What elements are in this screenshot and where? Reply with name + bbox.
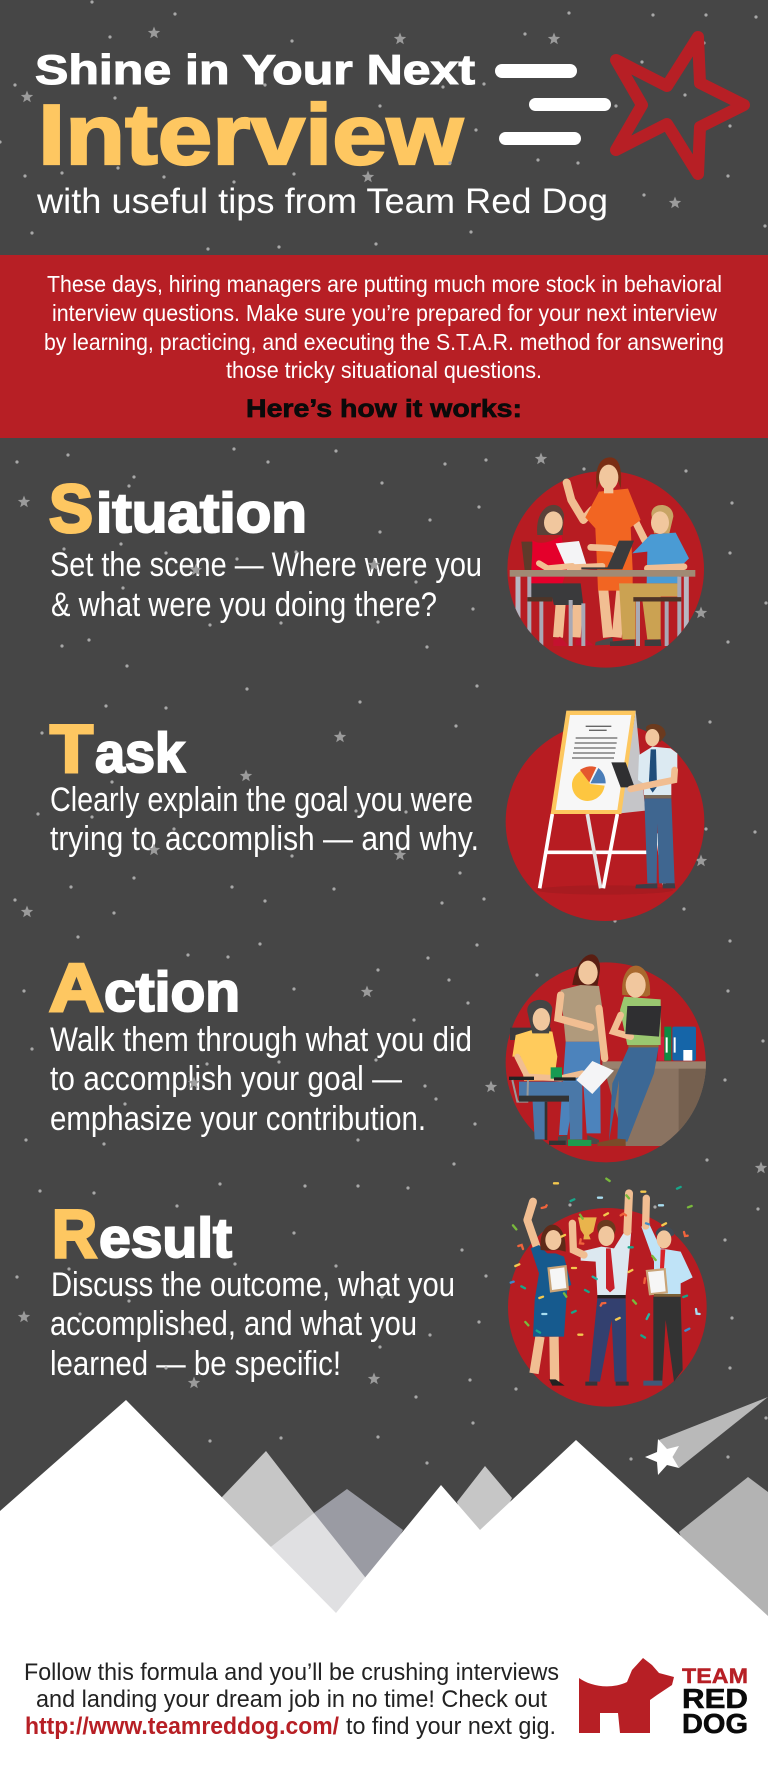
section: Situation text xyxy=(49,471,482,624)
table and chairs xyxy=(510,570,695,646)
desk xyxy=(602,1061,707,1146)
icon: red dog silhouette xyxy=(579,1658,674,1733)
heading: Result xyxy=(52,1196,232,1272)
description: Set the scene — Where were you xyxy=(50,546,482,584)
description: emphasize your contribution. xyxy=(50,1100,426,1138)
section: Task text xyxy=(50,711,479,858)
footer call to action: Follow this formula and you’ll be crushing interviews xyxy=(24,1659,559,1686)
man with raised arm and trophy xyxy=(572,1193,631,1386)
presenter man xyxy=(611,724,677,888)
heading: Task xyxy=(50,711,186,787)
easel legs xyxy=(540,814,664,888)
description: accomplished, and what you xyxy=(50,1305,417,1343)
intro paragraph xyxy=(44,271,724,383)
illustration: team meeting at table xyxy=(507,457,704,668)
intro paragraph: by learning, practicing, and executing the S.T.A.R. method for answering xyxy=(44,329,724,355)
flip chart board xyxy=(551,711,645,814)
logo wordmark xyxy=(682,1665,748,1739)
description xyxy=(50,546,482,624)
heading: Action: A xyxy=(49,950,104,1026)
illustration: presenter at easel xyxy=(506,711,704,921)
description xyxy=(50,781,479,858)
subheading: Here’s how it works: xyxy=(246,395,522,423)
title block xyxy=(35,46,608,221)
description: trying to accomplish — and why. xyxy=(50,820,479,858)
description: Discuss the outcome, what you xyxy=(51,1266,455,1304)
dark grey peak xyxy=(314,1489,403,1590)
heading: Situation xyxy=(49,471,307,547)
intro paragraph: interview questions. Make sure you’re prepared for your next interview xyxy=(52,300,717,326)
pie chart on board xyxy=(572,766,606,801)
mountains xyxy=(0,1400,768,1792)
sitting woman on desk xyxy=(597,966,661,1146)
section: Result text xyxy=(50,1196,455,1383)
standing woman xyxy=(558,954,605,1145)
laptop xyxy=(581,541,634,569)
confetti xyxy=(511,1179,700,1338)
logo wordmark: TEAM xyxy=(682,1665,748,1688)
description xyxy=(50,1021,472,1138)
light overlap facet xyxy=(262,1513,370,1625)
heading: Task: T xyxy=(50,711,93,787)
footer call to action xyxy=(24,1659,559,1740)
icon: shooting star in title xyxy=(495,37,744,174)
description: Walk them through what you did xyxy=(50,1021,472,1059)
logo: Team Red Dog xyxy=(579,1658,748,1739)
comet star xyxy=(645,1439,679,1475)
illustration: team at office desk xyxy=(506,954,707,1162)
intro paragraph: those tricky situational questions. xyxy=(226,357,542,383)
title word: Interview: Interview xyxy=(38,88,464,183)
description xyxy=(50,1266,455,1383)
standing woman in orange dress xyxy=(567,457,645,645)
heading: Situation: ituation xyxy=(96,481,307,544)
panel: red intro band xyxy=(0,255,768,438)
grey peak left xyxy=(222,1451,314,1560)
heading: Result: esult xyxy=(99,1206,232,1269)
shooting star over mountains xyxy=(645,1397,768,1475)
footer call to action: http://www.teamreddog.com/ xyxy=(25,1713,339,1740)
description: to accomplish your goal — xyxy=(50,1060,402,1098)
motion lines xyxy=(495,64,611,145)
seated man xyxy=(509,1000,614,1146)
title line: Shine in Your Next: Shine in Your Next xyxy=(35,46,475,93)
illustration: team celebrating with confetti xyxy=(508,1179,707,1407)
binders and mug xyxy=(658,1027,696,1061)
heading: Result: R xyxy=(52,1196,97,1272)
description: learned — be specific! xyxy=(50,1345,341,1383)
grey peak right xyxy=(679,1477,768,1640)
white snow range xyxy=(0,1400,768,1792)
footer call to action: to find your next gig. xyxy=(346,1713,556,1740)
subtitle: with useful tips from Team Red Dog xyxy=(36,182,608,221)
description: Clearly explain the goal you were xyxy=(50,781,473,819)
red outlined star xyxy=(616,37,744,174)
chair back xyxy=(521,542,537,570)
heading: Action: ction xyxy=(104,960,240,1023)
comet tail xyxy=(659,1397,768,1468)
heading: Action xyxy=(49,950,240,1026)
logo wordmark: RED xyxy=(682,1683,748,1714)
small grey peak xyxy=(457,1466,512,1540)
woman with certificate xyxy=(527,1202,571,1386)
man with certificate xyxy=(641,1198,693,1386)
logo wordmark: DOG xyxy=(682,1708,748,1739)
heading: Situation: S xyxy=(49,471,93,547)
section: Action text xyxy=(49,950,472,1138)
seated woman in red xyxy=(529,505,602,646)
footer call to action: and landing your dream job in no time! Check out xyxy=(36,1686,547,1713)
seated man in blue xyxy=(591,505,689,646)
intro paragraph: These days, hiring managers are putting much more stock in behavioral xyxy=(47,271,722,297)
heading: Task: ask xyxy=(95,721,186,784)
description: & what were you doing there? xyxy=(51,586,437,624)
